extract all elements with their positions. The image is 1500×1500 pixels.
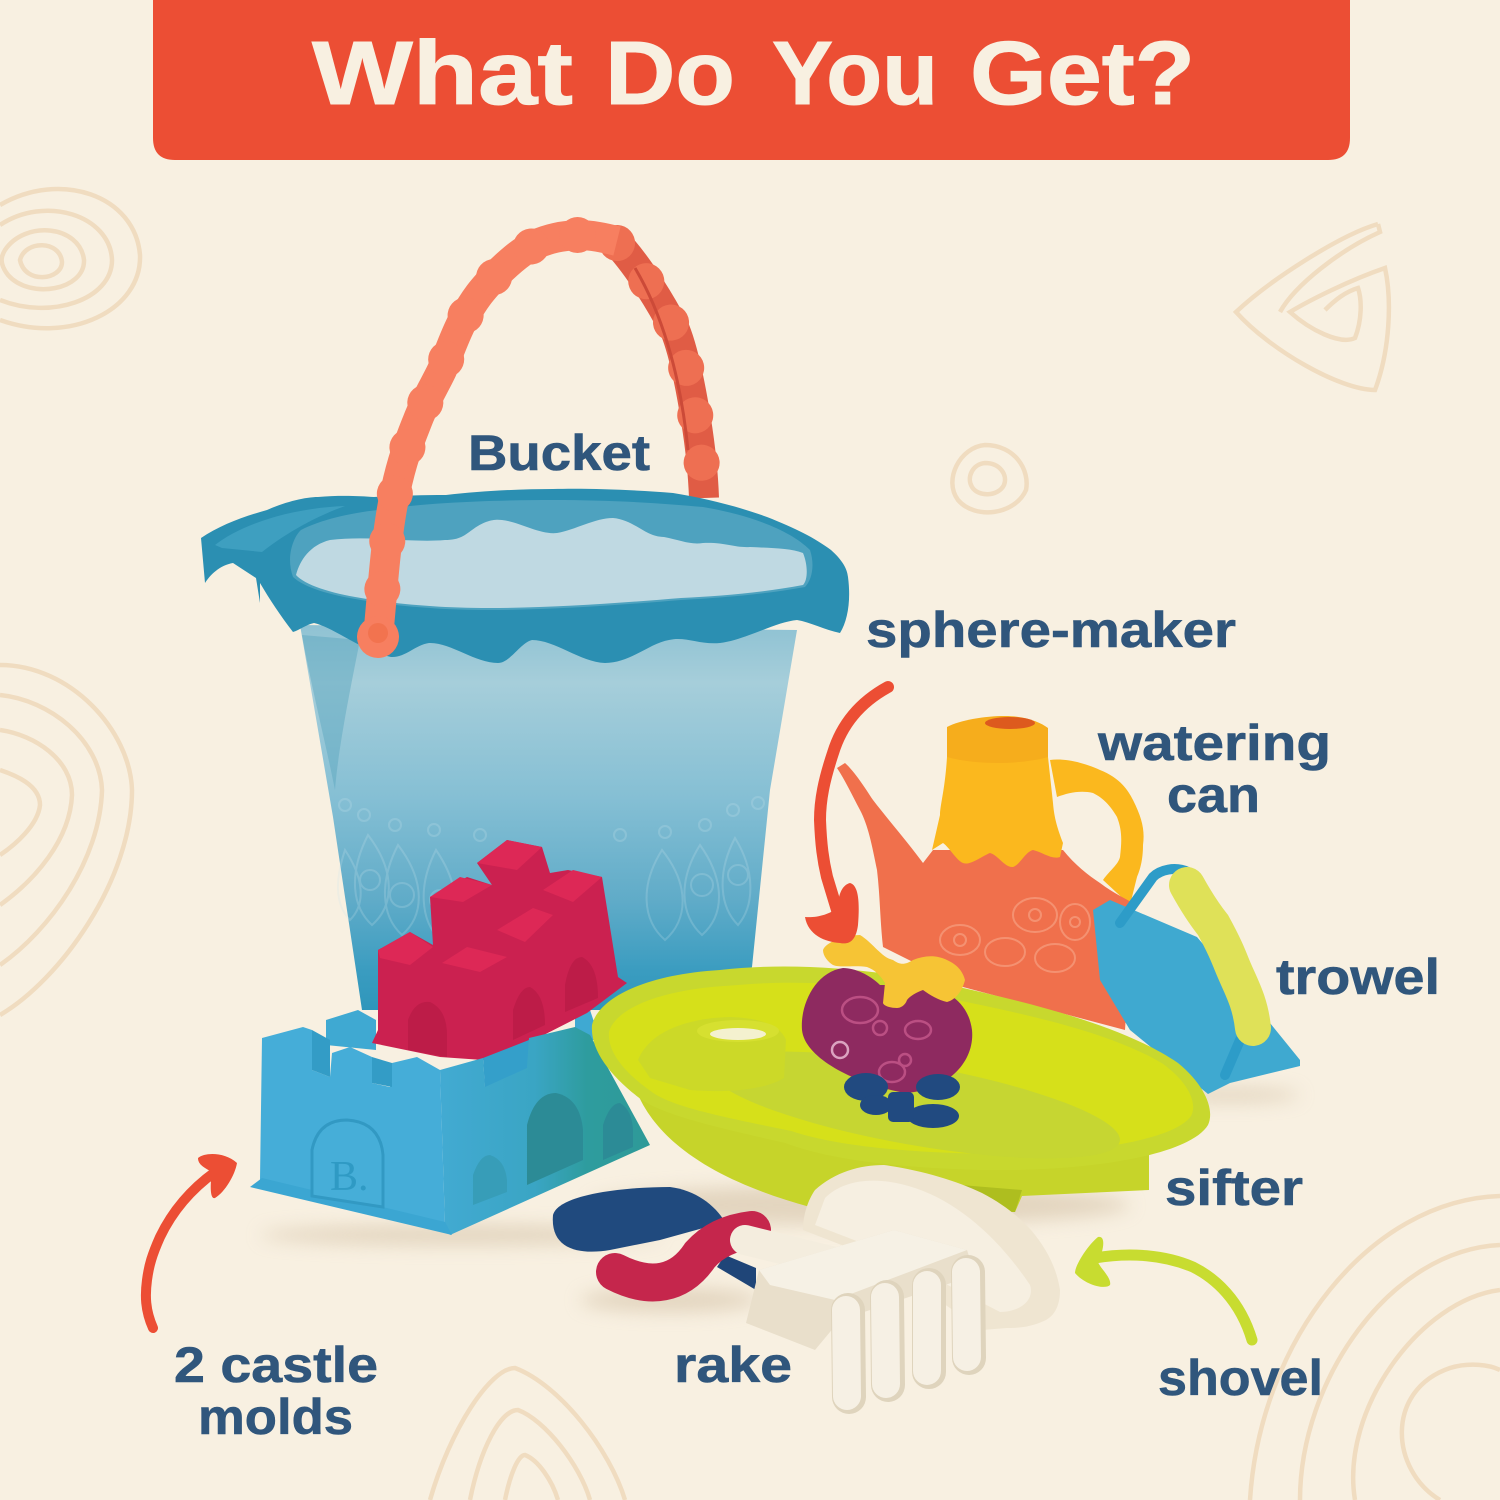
red castle top faces xyxy=(378,840,602,972)
rake tine highlights xyxy=(846,1272,967,1396)
title: Get? xyxy=(970,24,1195,124)
title xyxy=(312,24,1195,124)
label: 2 castle molds: 2 castle xyxy=(174,1337,378,1393)
blue castle arches xyxy=(473,1093,633,1205)
rake tines xyxy=(848,1272,969,1397)
label: sifter: sifter xyxy=(1165,1160,1303,1216)
trowel blade xyxy=(1093,900,1300,1094)
rake arm xyxy=(745,1240,835,1262)
label: 2 castle molds: molds xyxy=(198,1389,353,1445)
label: Bucket: Bucket xyxy=(468,425,650,481)
bucket front handle strap xyxy=(357,235,617,658)
blue castle right face xyxy=(440,1027,650,1235)
title: Do xyxy=(605,24,735,124)
can body and spout xyxy=(837,763,1133,1030)
product: bucket xyxy=(201,489,849,1010)
product: rake xyxy=(745,1230,975,1397)
blue castle door with B xyxy=(312,1120,383,1207)
sifter rim xyxy=(592,966,1210,1170)
title: You xyxy=(772,24,938,124)
trowel yellow grip xyxy=(1187,885,1253,1028)
bucket back handle strap xyxy=(617,243,704,498)
sphere pattern xyxy=(832,997,931,1082)
label: rake: rake xyxy=(674,1337,792,1393)
can handle xyxy=(1050,760,1144,905)
bucket rim xyxy=(201,489,849,663)
product: blue castle mold, back merlons xyxy=(326,1010,600,1050)
arrow: shovel xyxy=(1075,1237,1252,1340)
soft product shadows xyxy=(260,1088,1300,1312)
product: blue castle mold xyxy=(250,1027,650,1235)
blue castle merlon notch xyxy=(483,1040,529,1090)
label: watering can: can xyxy=(1167,767,1260,823)
sifter bowl xyxy=(609,983,1193,1154)
product: watering can xyxy=(837,716,1144,1030)
blue castle front face xyxy=(260,1027,445,1225)
sifter underside xyxy=(636,1090,1149,1212)
arrow: sphere-maker xyxy=(805,687,888,943)
trowel wire handle xyxy=(1120,869,1188,923)
product: navy and red handles xyxy=(553,1187,756,1290)
sifter cylinder xyxy=(638,1017,786,1091)
header banner xyxy=(153,0,1350,160)
label: shovel: shovel xyxy=(1158,1350,1323,1406)
red castle arches xyxy=(408,957,598,1057)
label: watering can: watering xyxy=(1097,715,1331,771)
purple sphere half xyxy=(802,968,972,1093)
can yellow neck xyxy=(932,757,1063,867)
can cap xyxy=(947,716,1048,763)
product: sphere-maker xyxy=(802,935,972,1128)
product: red castle mold xyxy=(372,840,627,1060)
sifter mesh xyxy=(703,1029,1127,1181)
blue castle door with B: B. xyxy=(330,1154,369,1200)
bucket inside wall xyxy=(290,500,812,610)
yellow stem xyxy=(823,935,965,1008)
arrow: castle molds xyxy=(146,1154,237,1328)
product: shovel xyxy=(803,1165,1060,1330)
navy bow xyxy=(844,1073,960,1128)
label: 2 castle molds xyxy=(174,1337,378,1445)
bucket inside light area xyxy=(296,518,807,608)
label: trowel: trowel xyxy=(1276,949,1440,1005)
label: watering can xyxy=(1097,715,1331,823)
bucket body xyxy=(300,625,797,1010)
product: trowel xyxy=(1093,869,1300,1094)
red castle body xyxy=(372,840,627,1060)
product: sifter xyxy=(592,966,1210,1212)
title: What xyxy=(312,24,573,124)
label: sphere-maker: sphere-maker xyxy=(866,602,1236,658)
can body pattern xyxy=(940,898,1090,972)
rake head xyxy=(746,1230,975,1350)
bucket embossed pattern xyxy=(338,797,764,940)
